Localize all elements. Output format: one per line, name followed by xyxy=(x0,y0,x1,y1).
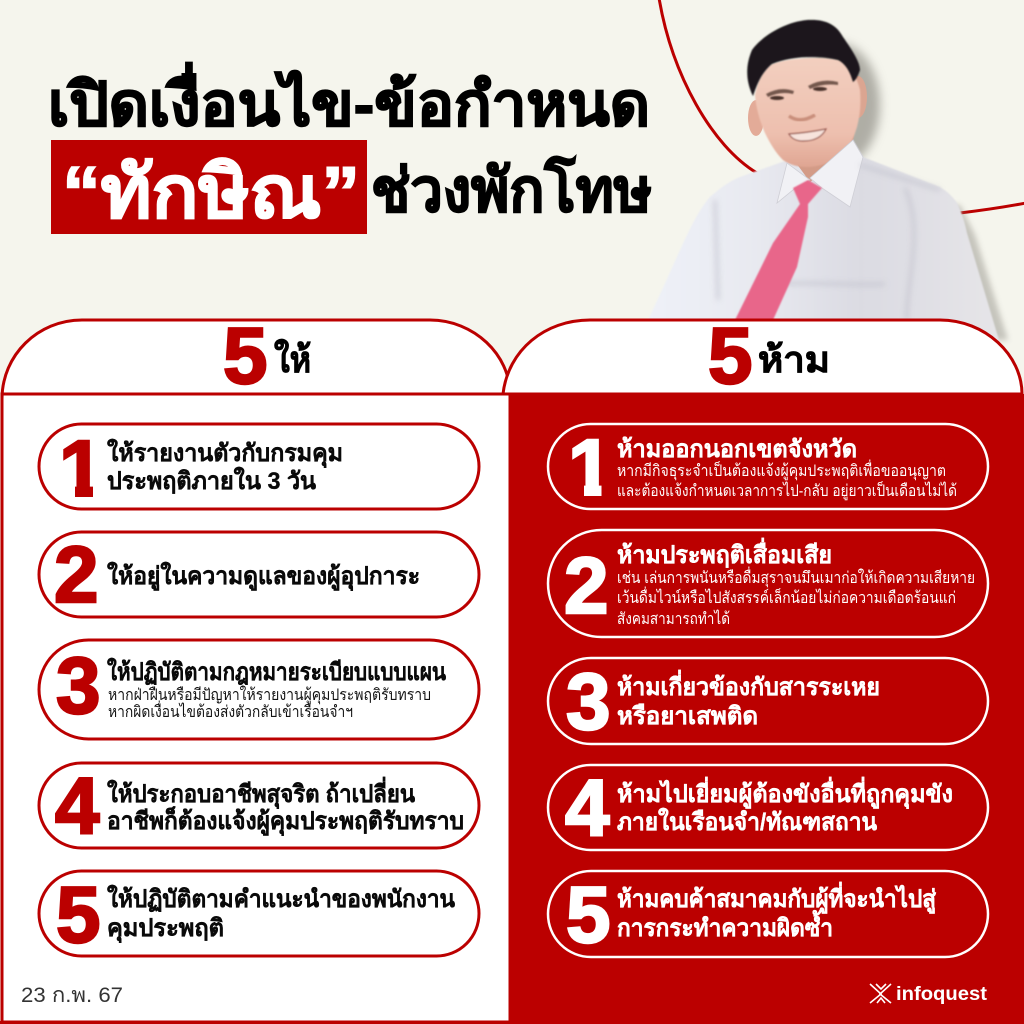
item 4: อาชีพก็ต้องแจ้งผู้คุมประพฤติรับทราบ xyxy=(107,806,464,837)
icon: X mark xyxy=(870,984,891,1003)
item 1: และต้องแจ้งกำหนดเวลาการไป-กลับ อยู่ยาวเป็นเดือนไม่ได้ xyxy=(617,480,957,501)
title line 1: เปิดเงื่อนไข-ข้อกำหนด xyxy=(48,62,650,138)
item 3: หรือยาเสพติด xyxy=(617,703,758,730)
item 2: ให้อยู่ในความดูแลของผู้อุปการะ xyxy=(107,561,420,592)
item 4: 4 xyxy=(565,763,610,852)
header label: ห้าม xyxy=(758,339,830,380)
item 2: 2 xyxy=(564,541,608,630)
shirt xyxy=(648,140,1002,350)
item 1: หากมีกิจธุระจำเป็นต้องแจ้งผู้คุมประพฤติเพื่อขออนุญาต xyxy=(617,459,946,481)
item 5: ให้ปฏิบัติตามคำแนะนำของพนักงาน xyxy=(107,884,456,913)
item 2: สังคมสามารถทำได้ xyxy=(617,609,730,628)
item 1: ห้ามออกนอกเขตจังหวัด xyxy=(617,436,857,463)
item 4: 4 xyxy=(55,761,100,850)
header label: 5 xyxy=(223,311,268,400)
date: 23 ก.พ. 67 xyxy=(21,984,123,1007)
pink tie xyxy=(735,180,822,320)
item 3: หากฝ่าฝืนหรือมีปัญหาให้รายงานผู้คุมประพฤติรับทราบ xyxy=(108,685,431,705)
outer red border bottom xyxy=(0,1021,510,1024)
hair xyxy=(747,20,860,96)
item 2: เว้นดื่มไวน์หรือไปสังสรรค์เล็กน้อยไม่ก่อความเดือดร้อนแก่ xyxy=(617,586,956,607)
item 1: 1 xyxy=(568,423,612,512)
item 3: 3 xyxy=(566,657,610,746)
item 5 xyxy=(548,870,988,959)
item 4: ภายในเรือนจำ/ทัณฑสถาน xyxy=(617,807,878,836)
item 4 xyxy=(39,761,479,850)
item 5 xyxy=(39,870,479,959)
header label xyxy=(708,311,830,400)
item 1: 1 xyxy=(59,424,104,513)
eyes and brows xyxy=(766,81,838,100)
logo: infoquest: infoquest xyxy=(896,984,988,1005)
item 5: 5 xyxy=(56,870,100,959)
photo: man in white shirt and pink tie xyxy=(648,20,1008,350)
item 2: 2 xyxy=(54,530,98,619)
nose xyxy=(789,115,815,120)
item 5: คุมประพฤติ xyxy=(107,915,224,944)
title xyxy=(48,62,652,234)
ear left xyxy=(748,100,764,136)
item 4: ห้ามไปเยี่ยมผู้ต้องขังอื่นที่ถูกคุมขัง xyxy=(617,776,953,810)
panel: 5 do's xyxy=(2,311,510,1022)
shirt folds xyxy=(715,165,940,320)
decorative red arc xyxy=(659,0,1024,216)
smile xyxy=(789,129,826,141)
neck xyxy=(783,125,855,182)
collar xyxy=(777,140,863,207)
ear right xyxy=(849,76,867,118)
item 2 xyxy=(39,530,479,619)
item 1 xyxy=(39,424,479,513)
item 3 xyxy=(39,640,479,739)
header label xyxy=(223,311,311,400)
item 3: 3 xyxy=(56,641,100,730)
panel header xyxy=(503,320,1022,394)
panel header xyxy=(2,320,510,399)
title line 2: ช่วงพักโทษ xyxy=(371,155,652,224)
item 2 xyxy=(548,530,988,637)
item 1: ให้รายงานตัวกับกรมคุม xyxy=(107,438,343,469)
item 1: ประพฤติภายใน 3 วัน xyxy=(107,466,317,495)
highlighted name box: “ทักษิณ” xyxy=(62,153,360,233)
item 3 xyxy=(548,657,988,746)
panel body xyxy=(2,394,510,1022)
item 5: ห้ามคบค้าสมาคมกับผู้ที่จะนำไปสู่ xyxy=(617,881,936,914)
header label: 5 xyxy=(708,311,752,400)
item 5: การกระทำความผิดซ้ำ xyxy=(617,909,833,942)
item 4 xyxy=(548,763,988,852)
panel body xyxy=(510,394,1024,1024)
item 2: ห้ามประพฤติเสื่อมเสีย xyxy=(617,537,832,569)
item 1 xyxy=(548,423,988,512)
item 5: 5 xyxy=(566,870,610,959)
item 3: ให้ปฏิบัติตามกฎหมายระเบียบแบบแผน xyxy=(107,657,447,686)
panel: 5 don'ts xyxy=(503,311,1024,1024)
header label: ให้ xyxy=(274,338,311,380)
item 4: ให้ประกอบอาชีพสุจริต ถ้าเปลี่ยน xyxy=(107,776,416,810)
item 3: หากผิดเงื่อนไขต้องส่งตัวกลับเข้าเรือนจำฯ xyxy=(108,700,353,721)
face xyxy=(755,58,860,167)
item 2: เช่น เล่นการพนันหรือดื่มสุราจนมึนเมาก่อให้เกิดความเสียหาย xyxy=(617,566,975,588)
item 3: ห้ามเกี่ยวข้องกับสารระเหย xyxy=(617,669,880,701)
